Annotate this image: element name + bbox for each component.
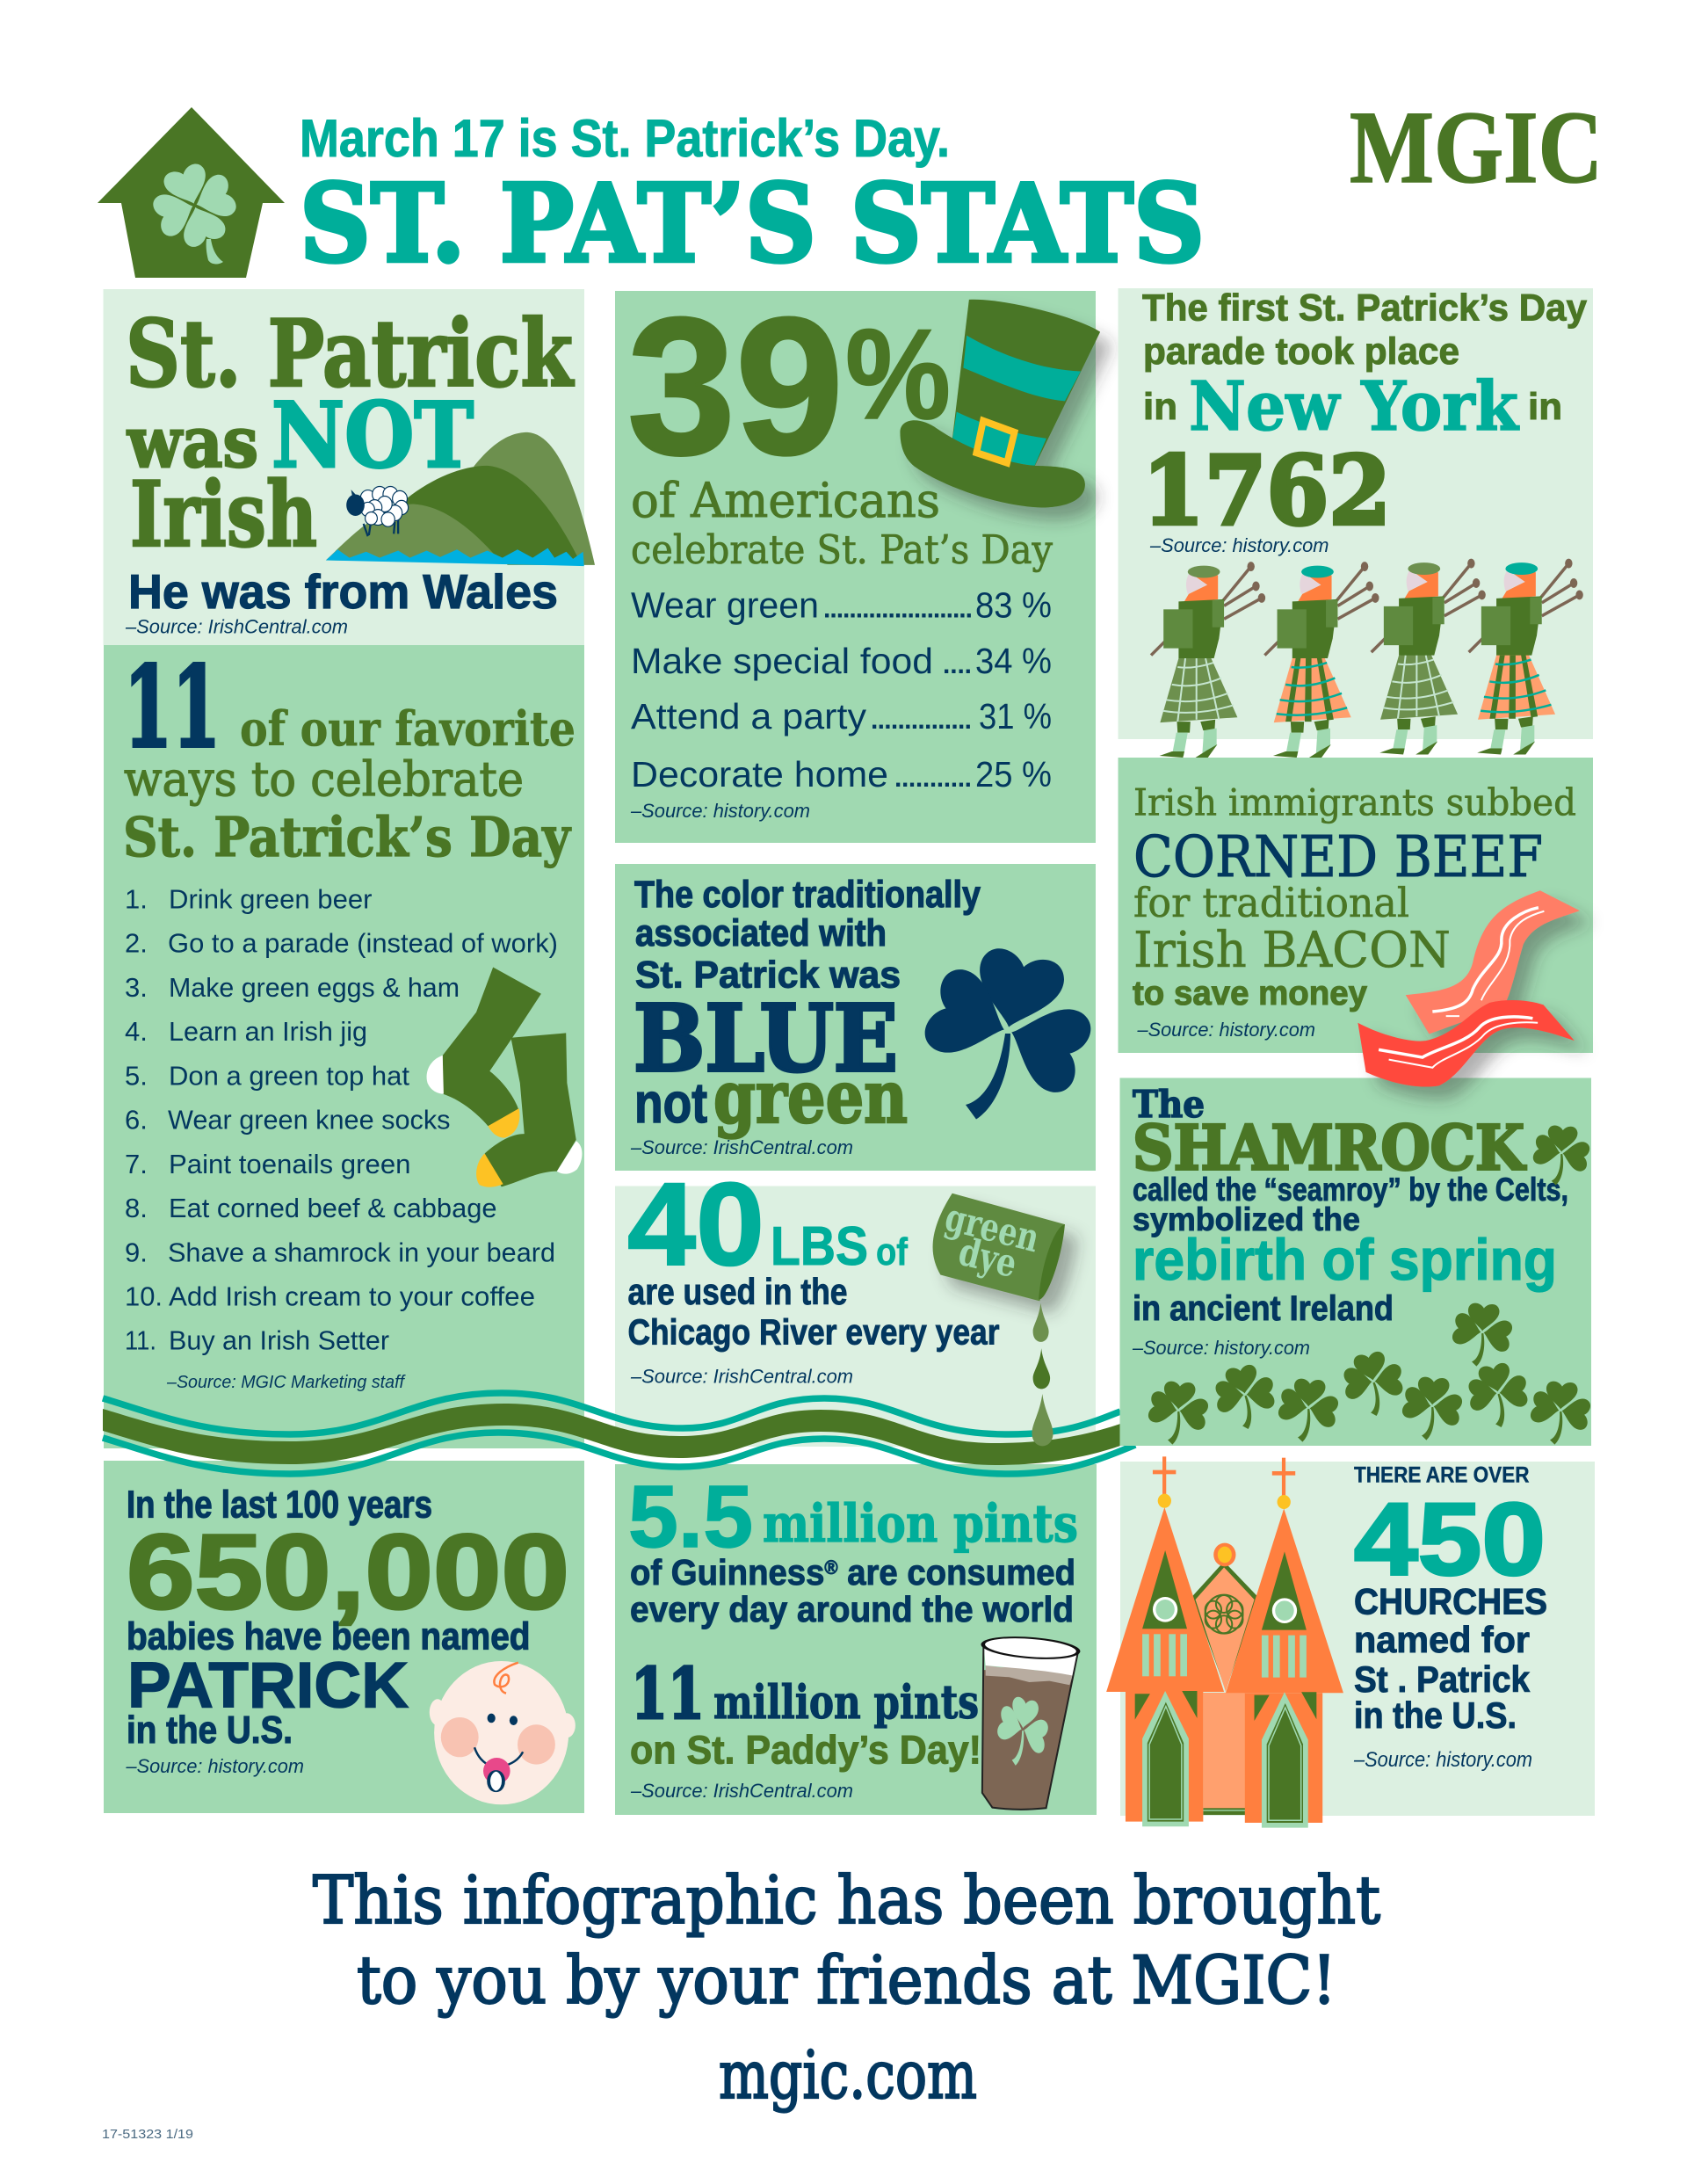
source: –Source: MGIC Marketing staff (166, 1373, 406, 1392)
icon: pint glass (979, 1634, 1082, 1810)
text: in the last 100 years: In the last 100 years (127, 1484, 432, 1526)
icon: bacon strips (1358, 890, 1580, 1087)
year 1762: 1762 (1142, 436, 1391, 547)
list of ways: Learn an Irish jig (169, 1016, 367, 1047)
list of ways: Add Irish cream to your coffee (169, 1281, 535, 1311)
logo: MGIC: MGIC (1350, 90, 1603, 205)
panel: shamrock (1119, 1077, 1598, 1448)
stat rows: ............... (871, 706, 972, 735)
list of ways: Go to a parade (instead of work) (168, 928, 558, 959)
panel: 40 lbs of green dye (615, 1159, 1096, 1447)
text: St. Patrick: St . Patrick (1354, 1658, 1531, 1700)
text: the color traditionally (634, 874, 981, 997)
panel: 450 churches (1106, 1456, 1595, 1828)
list of ways: 4. (125, 1016, 148, 1047)
source: –Source: history.com (1149, 534, 1329, 556)
text: Irish BACON: Irish BACON (1133, 922, 1451, 979)
percent sign: % (845, 302, 951, 446)
heading: St. Patrick (126, 299, 575, 408)
icon: green dye can (933, 1194, 1065, 1301)
subtitle: March 17 is St. Patrick’s Day. (300, 109, 950, 168)
main title: ST. PAT’S STATS (300, 160, 1205, 287)
icon: green dye can: dye (954, 1230, 1021, 1287)
stat rows: 31 % (979, 696, 1052, 736)
heading line 3: St. Patrick’s Day (123, 805, 572, 869)
icons: small shamrocks (1140, 1118, 1598, 1448)
stat rows: Make special food (631, 641, 933, 681)
list of ways: 11. (125, 1325, 156, 1356)
panel: 11 ways to celebrate (104, 642, 584, 1448)
panel: color blue not green (615, 864, 1096, 1171)
list of ways: Drink green beer (169, 884, 373, 914)
list of ways: 3. (125, 972, 148, 1003)
panel: St. Patrick was not Irish (104, 289, 595, 645)
source: –Source: IrishCentral.com (125, 615, 348, 638)
heading: was: was (127, 401, 258, 483)
heading line 1: of our favorite (240, 700, 576, 757)
text: PATRICK: PATRICK (127, 1651, 409, 1721)
website: mgic.com (719, 2036, 977, 2114)
source: –Source: history.com (1137, 1019, 1315, 1041)
list of ways: Make green eggs & ham (169, 972, 460, 1003)
icon: baby face (430, 1661, 576, 1804)
heading line 2: ways to celebrate (124, 751, 524, 807)
word: green: green (713, 1056, 908, 1140)
text: are used in the: are used in the (627, 1271, 847, 1312)
text: of: of (876, 1230, 908, 1273)
list of ways: Paint toenails green (169, 1149, 411, 1179)
text: in: in (1143, 386, 1177, 428)
panel: first parade (1118, 287, 1593, 758)
footer line 1: This infographic has been brought (313, 1861, 1380, 1939)
icon: four bagpipers (1151, 559, 1583, 758)
text: the first: The first St. Patrick’s Day (1142, 287, 1587, 329)
panel: 39 percent of Americans (615, 278, 1100, 843)
text: celebrate St. Pat's Day: celebrate St. Pat’s Day (631, 526, 1053, 573)
text: the color traditionally: associated with (635, 912, 887, 954)
list of ways: Eat corned beef & cabbage (169, 1193, 497, 1223)
list of ways (125, 884, 558, 1356)
footer message (313, 1861, 1380, 2114)
stat rows: 83 % (975, 585, 1052, 626)
text: the color traditionally: St. Patrick was (635, 954, 901, 997)
text: CHURCHES: CHURCHES (1354, 1580, 1547, 1622)
stat rows: Decorate home (631, 754, 888, 795)
icon: hills, sheep and sea (326, 432, 595, 566)
big stat 650,000: 650,000 (127, 1512, 569, 1631)
text: called the seamroy: called the “seamroy” by the Celts, (1133, 1172, 1568, 1208)
list of ways: 10. (125, 1281, 163, 1311)
title block (300, 109, 1205, 287)
icon: green socks (427, 967, 582, 1187)
icon: green dye can: green (941, 1195, 1044, 1261)
heading: NOT: NOT (272, 383, 474, 489)
list of ways: 2. (125, 928, 148, 959)
big number 11: 11 (124, 642, 221, 773)
stat rows: 34 % (975, 641, 1052, 681)
icon: church (1106, 1456, 1343, 1828)
text: of Americans: of Americans (631, 473, 940, 528)
text: to save money: to save money (1133, 975, 1367, 1012)
river band (103, 1393, 1135, 1474)
list of ways: Buy an Irish Setter (169, 1325, 389, 1356)
text: the color traditionally: The color traditionally (634, 874, 981, 916)
list of ways: 1. (125, 884, 148, 914)
text: of Guinness: are consumed (838, 1552, 1075, 1593)
big stat 450: 450 (1354, 1482, 1546, 1596)
icon: house with four-leaf clover (98, 107, 285, 278)
text: Chicago River: Chicago River every year (627, 1311, 1000, 1352)
text: named for: named for (1354, 1619, 1530, 1660)
stat rows: ........... (894, 764, 972, 793)
panel: 5.5 million pints (615, 1464, 1097, 1815)
text: of Guinness: of Guinness (630, 1552, 838, 1593)
text: million pints: million pints (713, 1676, 979, 1730)
text: of Guinness: ® (824, 1556, 838, 1578)
source: –Source: history.com (126, 1755, 304, 1777)
stat rows: Wear green (631, 585, 819, 626)
subheading: He was from Wales (128, 564, 558, 619)
word: not: not (634, 1071, 707, 1135)
big stat 39: 39 (627, 278, 844, 496)
list of ways: 5. (125, 1060, 148, 1092)
source: –Source: IrishCentral.com (630, 1366, 853, 1387)
list of ways: 6. (125, 1105, 148, 1136)
text: Irish immigrants subbed: Irish immigrants subbed (1133, 780, 1576, 824)
icon: green top hat (900, 300, 1100, 508)
icon: blue shamrock (920, 945, 1096, 1120)
big stat 5.5: 5.5 (628, 1468, 753, 1566)
text: parade took place: parade took place (1143, 330, 1459, 373)
panel: corned beef (1118, 758, 1593, 1053)
print code: 17-51323 1/19 (102, 2127, 193, 2142)
footer line 2: to you by your friends at MGIC! (357, 1941, 1336, 2019)
stat rows: .... (943, 650, 972, 679)
text: babies: babies have been named (127, 1615, 531, 1658)
text: in: in (1528, 386, 1562, 428)
heading: Irish: Irish (130, 462, 317, 568)
big stat 40: 40 (627, 1159, 764, 1290)
text: LBS: LBS (771, 1216, 868, 1277)
text: for traditional: for traditional (1133, 879, 1409, 926)
big word BLUE: BLUE (634, 984, 898, 1092)
text: in ancient Ireland: in ancient Ireland (1133, 1289, 1394, 1328)
source: –Source: history.com (1132, 1337, 1310, 1359)
icon: green dye drops (1032, 1303, 1053, 1446)
text: million pints: million pints (763, 1493, 1078, 1554)
list of ways: 8. (125, 1193, 148, 1223)
big stat 11: 11 (631, 1652, 705, 1735)
text: every day: every day around the world (630, 1589, 1074, 1629)
source: –Source: history.com (1353, 1748, 1532, 1772)
source: –Source: IrishCentral.com (630, 1136, 853, 1158)
stat rows: 25 % (975, 754, 1052, 795)
stat rows: ....................... (823, 594, 973, 624)
text: in the U.S.: in the U.S. (127, 1709, 293, 1752)
stat rows: Attend a party (631, 696, 867, 736)
list of ways: Wear green knee socks (168, 1105, 450, 1136)
text: The: The (1133, 1083, 1205, 1126)
text: in the U.S.: in the U.S. (1354, 1694, 1517, 1736)
source: –Source: history.com (630, 800, 810, 822)
list of ways: Don a green top hat (169, 1060, 409, 1092)
text: SHAMROCK: SHAMROCK (1133, 1111, 1526, 1185)
text: there are over: THERE ARE OVER (1354, 1462, 1529, 1487)
text: symbolized the: symbolized the (1133, 1201, 1360, 1237)
list of ways: 9. (125, 1237, 148, 1267)
panel: 650,000 babies named Patrick (104, 1461, 584, 1813)
source: –Source: IrishCentral.com (630, 1780, 853, 1802)
list of ways: 7. (125, 1149, 148, 1179)
text: on St. Paddy's Day: on St. Paddy’s Day! (630, 1728, 981, 1772)
text: New York: New York (1189, 367, 1520, 446)
stat rows (631, 585, 1052, 795)
text: rebirth of spring: rebirth of spring (1133, 1227, 1557, 1292)
text: CORNED BEEF: CORNED BEEF (1133, 824, 1543, 890)
list of ways: Shave a shamrock in your beard (168, 1237, 555, 1267)
